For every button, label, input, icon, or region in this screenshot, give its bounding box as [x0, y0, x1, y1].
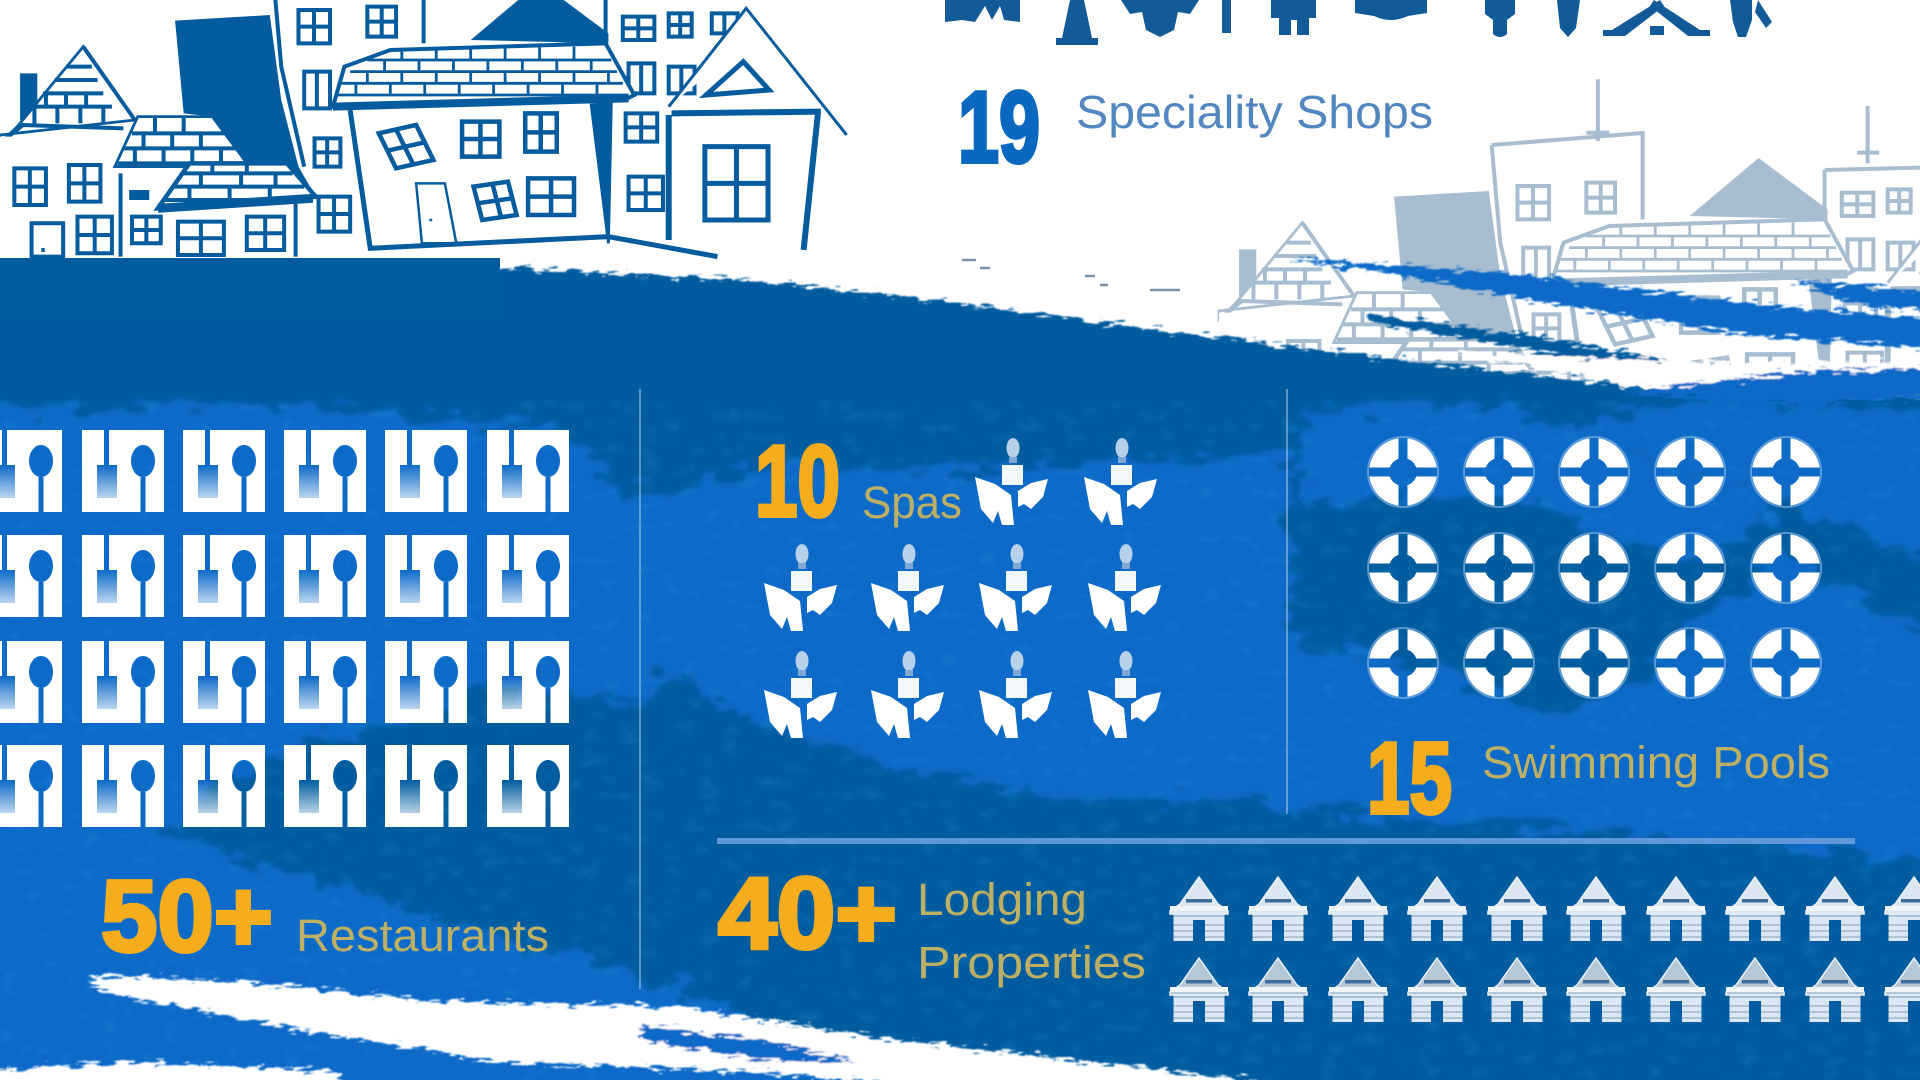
bottom white brush streaks: [0, 975, 1265, 1080]
stat: 15 swimming pools: [1367, 723, 1830, 835]
stat: 10 spas: [755, 426, 962, 538]
icon: paddle: [1730, 0, 1772, 37]
divider: left vertical: [639, 389, 641, 989]
speciality shop icon row: [945, 0, 1772, 45]
lifebuoy icon grid: [1368, 437, 1821, 698]
stat: 40+ lodging properties: Lodging: [917, 874, 1087, 925]
stat: 15 swimming pools: Swimming Pools: [1482, 737, 1830, 788]
stat: 10 spas: Spas: [862, 477, 962, 528]
top right brush streaks: [1284, 258, 1920, 405]
icon: necktie: [1557, 0, 1580, 37]
stat: 40+ lodging properties: [718, 858, 1146, 988]
stat: 15 swimming pools: 15: [1367, 723, 1452, 835]
stat: 50+ restaurants: [101, 861, 549, 973]
bright blue brush texture: [0, 405, 1920, 1080]
panel: restaurants: [0, 430, 569, 973]
mottled brush grain: [0, 400, 1920, 1080]
panel: spas: [755, 426, 1161, 738]
stat: 19 speciality shops: [958, 72, 1433, 184]
icon: shirt: [945, 0, 1020, 22]
stat: 19 speciality shops: Speciality Shops: [1076, 86, 1433, 138]
spa icon grid: [764, 438, 1161, 738]
icon: flower: [1121, 0, 1199, 37]
faded houses illustration behind the brush stroke: [1219, 79, 1920, 433]
stat: 50+ restaurants: Restaurants: [296, 910, 549, 961]
debris specks: [962, 260, 1180, 290]
stat: 10 spas: 10: [755, 426, 840, 538]
divider: lodging horizontal: [717, 838, 1855, 844]
lodging icon rows: [1170, 877, 1920, 1022]
panel: swimming pools: [1367, 437, 1830, 835]
icon: hockey sticks: [1603, 0, 1710, 36]
icon: traffic cone: [1056, 0, 1098, 45]
dark blue brush-stroke background panel: [0, 258, 1920, 1080]
icon: stick: [1222, 0, 1231, 33]
icon: basket: [1355, 0, 1427, 20]
icon: bottle: [1485, 0, 1515, 37]
stat: 40+ lodging properties: 40+: [718, 858, 897, 970]
icon: clothing figure: [1271, 0, 1316, 35]
divider: right vertical: [1286, 389, 1288, 814]
restaurant icon grid: [0, 430, 569, 827]
panel: lodging: [718, 858, 1920, 1022]
stat: 50+ restaurants: 50+: [101, 861, 273, 973]
stat: 40+ lodging properties: Properties: [917, 937, 1146, 988]
houses illustration: [0, 0, 900, 257]
stat: 19 speciality shops: 19: [958, 72, 1040, 184]
